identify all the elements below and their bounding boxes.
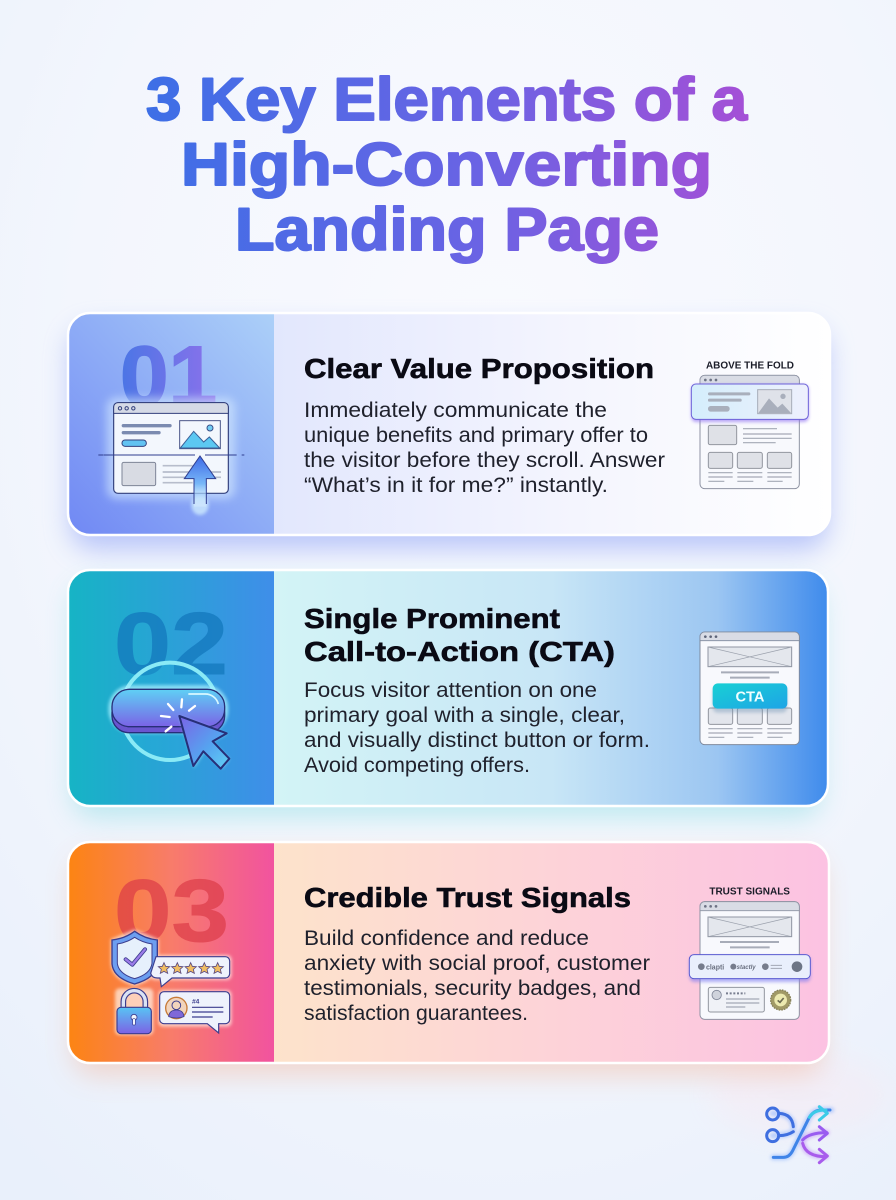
text block: unique benefits and primary offer to	[304, 424, 648, 447]
text block	[304, 399, 665, 497]
heading: Single Prominent	[304, 603, 560, 634]
panel: single prominent call-to-action	[68, 570, 828, 818]
text block: Immediately communicate the	[304, 399, 607, 422]
text block: anxiety with social proof, customer	[304, 952, 650, 975]
panel: credible trust signals	[68, 842, 829, 1076]
icon: above the fold wireframe	[691, 361, 809, 489]
icon: shuffle arrows logo	[767, 1107, 831, 1163]
text block: “What’s in it for me?” instantly.	[304, 474, 608, 497]
number 03: 03	[114, 861, 229, 960]
number 02: 02	[114, 594, 228, 693]
number 01: 01	[120, 329, 217, 423]
text block	[304, 679, 650, 777]
text block: Avoid competing offers.	[304, 754, 530, 777]
panel: clear value proposition	[68, 313, 830, 550]
text block: the visitor before they scroll. Answer	[304, 449, 665, 472]
title: 3 Key Elements of a	[146, 66, 748, 133]
icon: trust signals wireframe: TRUST SIGNALS	[709, 886, 791, 897]
text block: Build confidence and reduce	[304, 927, 589, 950]
icon: star rating bubble	[151, 957, 230, 987]
heading	[304, 603, 615, 667]
text block: primary goal with a single, clear,	[304, 704, 625, 727]
text block: Focus visitor attention on one	[304, 679, 597, 702]
icon: CTA wireframe: CTA	[735, 690, 765, 706]
icon: padlock	[117, 991, 151, 1034]
title	[146, 66, 748, 263]
text block	[304, 927, 650, 1025]
icon: trust signals wireframe	[689, 886, 811, 1019]
icon: trust signals wireframe: clapti	[706, 964, 724, 971]
heading: Clear Value Proposition	[304, 353, 654, 384]
icon: button with cursor	[108, 663, 230, 769]
icon: CTA wireframe	[700, 632, 799, 745]
text block: satisfaction guarantees.	[304, 1002, 528, 1025]
icon: testimonial bubble: #4	[192, 998, 200, 1005]
icon: shield, rating, lock and testimonial	[111, 929, 232, 1035]
icon: trust signals wireframe: stactly	[737, 965, 756, 971]
icon: shield	[112, 931, 157, 984]
title: Landing Page	[235, 196, 659, 263]
icon: above the fold wireframe: ABOVE THE FOLD	[706, 361, 794, 372]
icon: browser with fold and up arrow	[98, 397, 244, 515]
heading: Call-to-Action (CTA)	[304, 636, 615, 667]
title: High-Converting	[181, 131, 712, 198]
text block: testimonials, security badges, and	[304, 977, 641, 1000]
text block: and visually distinct button or form.	[304, 729, 650, 752]
heading: Credible Trust Signals	[304, 882, 631, 913]
